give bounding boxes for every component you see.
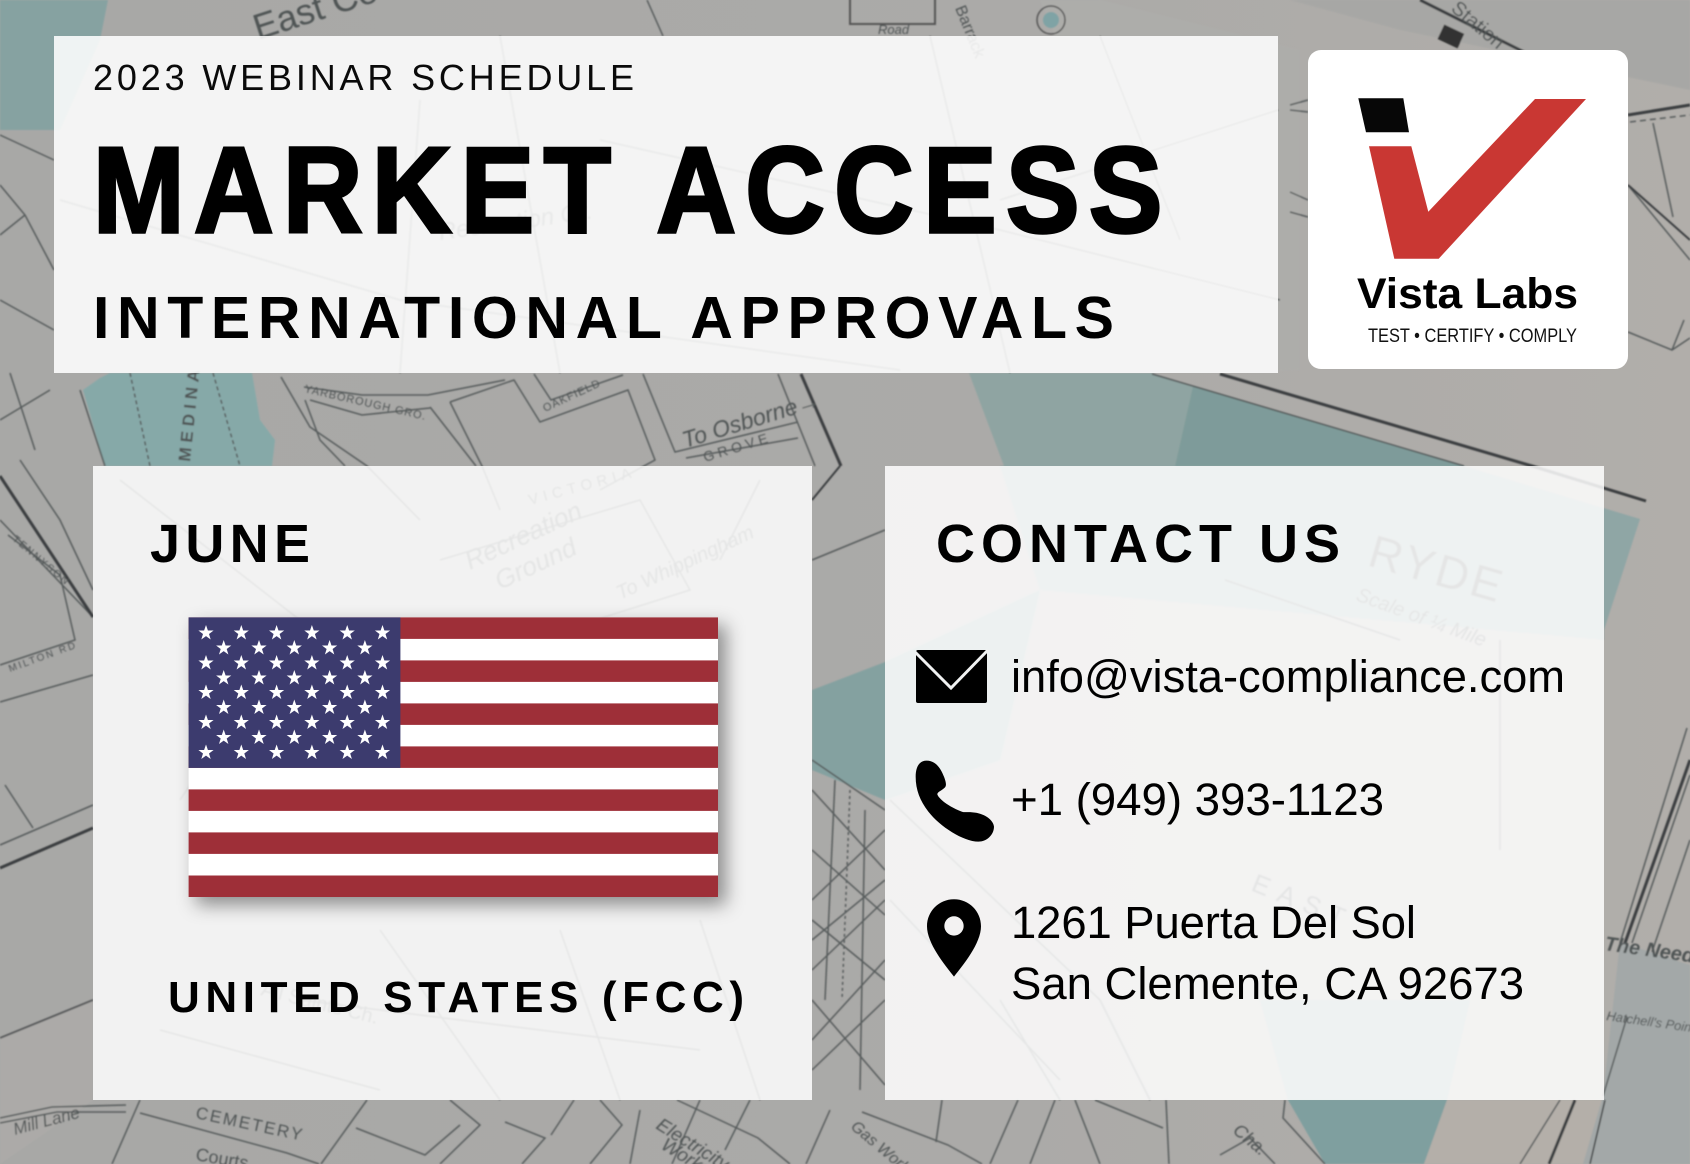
title: market access: MARKET ACCESS [93,122,1162,258]
flag stars [198,625,390,759]
map labels: YARBOROUGH GRO. [303,383,428,423]
street address: 1261 Puerta Del Sol [1011,897,1416,948]
icon: location pin [927,899,981,977]
map labels: MILTON RD [7,640,79,675]
map labels: Ground [490,531,583,595]
map labels: To Osborne→ [679,386,823,453]
map labels: Recreation Gr. [437,198,594,246]
logo card: Vista Labs [1308,50,1628,369]
heading: contact us: CONTACT US [936,514,1340,574]
phone number: +1 (949) 393-1123 [1011,774,1384,825]
map labels: To Whippingham [613,521,757,605]
icon: Vista Labs mark [1358,98,1586,259]
map labels: OAKFIELD [541,377,603,415]
heading: month: JUNE [150,514,310,574]
map labels: Road [878,22,910,37]
street address [1011,897,1524,1009]
map labels: RYDE [1363,525,1511,613]
panel: contact [885,466,1604,1100]
subtitle: international approvals: INTERNATIONAL APPROVALS [93,285,1114,351]
logo tagline: TEST • CERTIFY • COMPLY [1368,325,1577,347]
map labels: CEMETERY [194,1103,306,1145]
map labels: EAST [1248,868,1359,936]
flag: United States [189,617,726,905]
map labels: Scale of ¼ Mile [1353,584,1489,651]
map labels: VICTORIA [527,464,638,509]
map labels: MEDINA [175,364,204,462]
map labels: TENNYSON [10,534,72,588]
logo wordmark: Vista Labs [1357,270,1578,318]
map labels: All Saints Ch. [259,979,381,1029]
email address: info@vista-compliance.com [1011,651,1565,702]
map labels: GROVE [701,429,773,465]
street address: San Clemente, CA 92673 [1011,958,1524,1009]
icon: envelope [915,650,988,703]
map labels: Barrack [951,3,988,62]
panel: June schedule [93,466,812,1100]
map labels: Recreation [460,495,586,575]
icon: phone handset [916,761,994,842]
faint under panels [60,200,900,370]
subtitle: webinar schedule: 2023 WEBINAR SCHEDULE [93,57,634,98]
panel: header [54,36,1278,373]
map labels: Mill Lane [11,1103,82,1139]
label: country and agency: UNITED STATES (FCC) [168,973,744,1022]
map labels: Cha. [1229,1120,1271,1160]
